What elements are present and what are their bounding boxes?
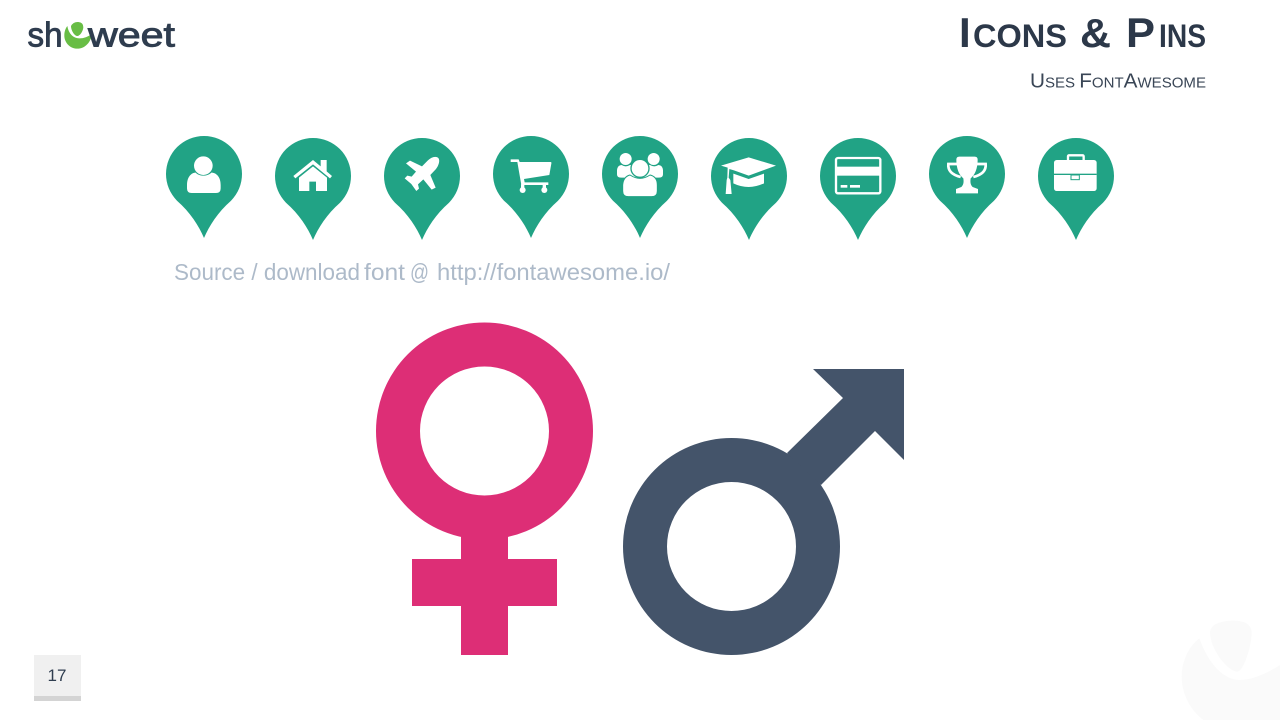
title: & — [1080, 10, 1111, 56]
icon: credit card — [836, 158, 880, 193]
page number value: 17 — [48, 666, 66, 685]
page number — [34, 655, 81, 701]
icon: home — [293, 160, 332, 191]
title: P — [1126, 9, 1155, 56]
pin row — [166, 136, 1114, 240]
pin: plane — [384, 138, 460, 240]
icon: cart — [511, 159, 551, 193]
title: INS — [1159, 18, 1206, 54]
subtitle: USES FONTAWESOME — [1030, 70, 1206, 92]
logo: showeet — [28, 16, 176, 54]
title: I — [959, 9, 971, 56]
pin: home — [275, 138, 351, 240]
icon: briefcase — [1054, 155, 1097, 191]
pin: user — [166, 136, 242, 238]
icon: male symbol — [623, 369, 904, 655]
source note: font — [364, 259, 406, 285]
watermark: corner logo — [1182, 621, 1280, 720]
icon: graduation cap — [721, 157, 776, 194]
source note: @ — [410, 259, 429, 285]
source note: Source / download — [174, 259, 360, 285]
source note: http://fontawesome.io/ — [437, 259, 671, 285]
icon: female symbol — [376, 322, 593, 655]
pin: trophy — [929, 136, 1005, 238]
source note — [174, 259, 671, 285]
icon: user — [187, 156, 221, 193]
logo text left: sh — [28, 16, 62, 54]
logo text right: weet — [87, 16, 176, 54]
pin: users — [602, 136, 678, 238]
icon: trophy — [948, 157, 986, 193]
icon: users — [617, 153, 663, 197]
icon: plane — [405, 157, 439, 191]
title: CONS — [973, 18, 1067, 54]
pin: cart — [493, 136, 569, 238]
logo mark — [64, 22, 92, 49]
pin: credit card — [820, 138, 896, 240]
title — [959, 9, 1206, 56]
pin: briefcase — [1038, 138, 1114, 240]
pin: graduation cap — [711, 138, 787, 240]
